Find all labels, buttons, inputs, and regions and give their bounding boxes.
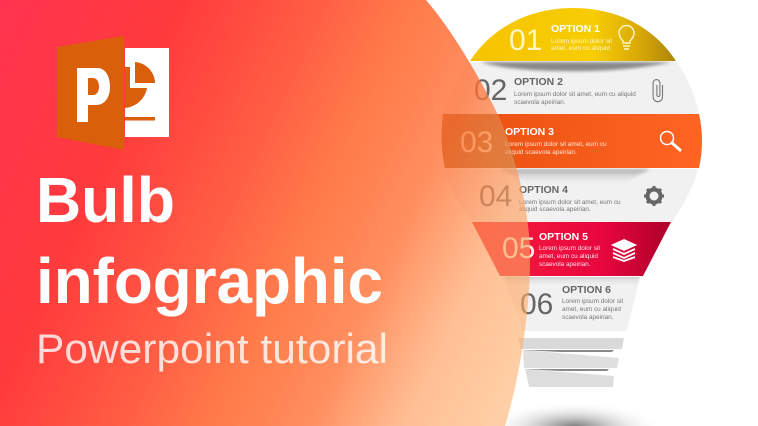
- band 3: aliquid scaevola apeirian.: [505, 149, 577, 156]
- bulb ground shadow: [486, 402, 662, 426]
- title line 2: infographic: [36, 245, 383, 317]
- band 4: Lorem ipsum dolor sit amet, eum cu: [519, 199, 621, 206]
- band 5: amet, eum cu aliquid: [539, 253, 598, 260]
- band 2: scaevola apeirian.: [514, 99, 566, 106]
- band 1: 01: [509, 24, 542, 57]
- band 4: 04: [479, 180, 512, 213]
- band 1: [470, 8, 676, 61]
- band 4: OPTION 4: [519, 184, 568, 196]
- band 4: [444, 169, 698, 222]
- subtitle: Powerpoint tutorial: [36, 325, 388, 372]
- band 4: aliquid scaevola apeirian.: [519, 206, 591, 213]
- band 3: Lorem ipsum dolor sit amet, eum cu: [505, 141, 607, 148]
- band 2: Lorem ipsum dolor sit amet, eum cu aliquid: [514, 91, 636, 98]
- band 5: Lorem ipsum dolor sit: [539, 245, 600, 252]
- band 6: amet, eum cu aliquid: [562, 306, 621, 313]
- band 6: [502, 277, 640, 331]
- logo door: [57, 36, 124, 150]
- powerpoint logo: [57, 36, 169, 150]
- band 1: amet, eum cu aliquid: [551, 45, 610, 52]
- title: [36, 164, 388, 372]
- bulb base: [518, 338, 624, 387]
- band 3: [442, 114, 702, 168]
- band 5: [472, 222, 671, 276]
- icon: book stack: [613, 240, 635, 261]
- logo letter P: [77, 68, 110, 122]
- band 6: Lorem ipsum dolor sit: [562, 298, 623, 305]
- gradient overlay shape: [0, 0, 530, 426]
- band 2: [443, 62, 699, 114]
- logo sheet: [125, 48, 169, 137]
- bulb infographic: [442, 8, 702, 426]
- icon: light bulb: [619, 26, 634, 49]
- band 1: OPTION 1: [551, 23, 600, 35]
- band 5: OPTION 5: [539, 231, 588, 243]
- icon: paperclip: [653, 80, 662, 102]
- band 5: scaevola apeirian.: [539, 261, 591, 268]
- icon: magnifier: [660, 132, 680, 150]
- band 3: 03: [460, 126, 493, 159]
- band 6: 06: [520, 288, 553, 321]
- band 6: OPTION 6: [562, 284, 611, 296]
- band 5: 05: [502, 232, 535, 265]
- title line 1: Bulb: [36, 164, 175, 236]
- band 3: OPTION 3: [505, 126, 554, 138]
- band 2: 02: [474, 74, 507, 107]
- band 1: Lorem ipsum dolor sit: [551, 38, 612, 45]
- band 2: OPTION 2: [514, 76, 563, 88]
- band 6: scaevola apeirian.: [562, 314, 614, 321]
- icon: gear: [644, 186, 664, 206]
- logo chart: [125, 62, 155, 120]
